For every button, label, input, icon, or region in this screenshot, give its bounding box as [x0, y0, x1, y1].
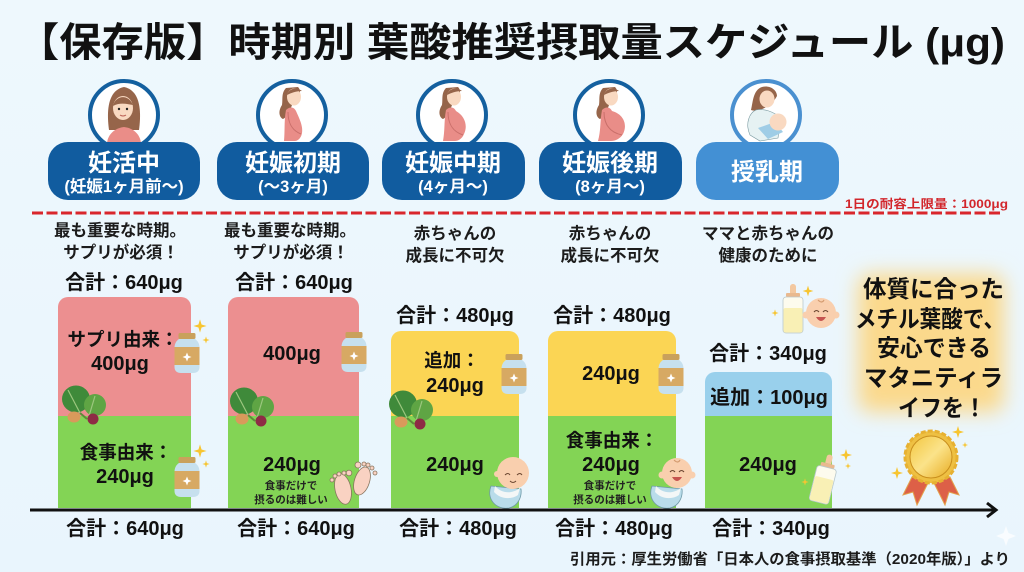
panel: stage label 妊娠後期	[539, 142, 682, 200]
axis arrow	[30, 503, 996, 517]
panel: stage label 授乳期	[696, 142, 839, 200]
icon: supplement bottle 3	[342, 332, 366, 372]
bar chart: 授乳期: 追加：100μg	[710, 386, 828, 409]
stage description 4: 成長に不可欠	[560, 245, 660, 265]
icon: mother nursing	[732, 81, 800, 149]
tolerable upper limit line	[32, 212, 1000, 214]
panel: stage label 妊娠中期: (4ヶ月～)	[418, 178, 488, 196]
icon: gold medal	[891, 426, 968, 505]
top total 2: 合計：640μg	[235, 271, 353, 294]
panel: stage label 妊活中: 妊活中	[88, 150, 160, 177]
bar chart: 妊娠初期: 摂るのは難しい	[254, 493, 328, 506]
citation: 引用元：厚生労働省「日本人の食事摂取基準（2020年版）」より	[570, 550, 1010, 568]
stage description 2: サプリが必須！	[233, 242, 349, 262]
bar chart: 妊娠後期: 摂るのは難しい	[573, 493, 647, 506]
stage description 5: 健康のために	[718, 246, 818, 265]
callout: マタニティラ	[864, 365, 1003, 391]
icon: milk bottle on bar	[809, 452, 840, 505]
stage description 2	[224, 221, 356, 262]
panel: stage label 授乳期: 授乳期	[731, 159, 803, 186]
icon: pregnant early	[258, 81, 326, 149]
panel: stage label 妊娠初期	[217, 142, 369, 200]
bottom total 2: 合計：640μg	[237, 517, 355, 540]
panel: stage label 妊娠初期: (～3ヶ月)	[258, 178, 328, 196]
icon: supplement bottle 4	[502, 354, 526, 394]
icon: supplement bottle 5	[658, 354, 684, 394]
bottom total 3: 合計：480μg	[399, 517, 517, 540]
bar chart: 妊娠中期: 240μg	[426, 375, 484, 397]
callout glow	[858, 274, 1004, 412]
bar chart: 妊活中: 400μg	[91, 353, 149, 375]
bar chart: 妊娠後期: 食事由来：	[566, 430, 658, 451]
stage description 1: 最も重要な時期。	[54, 221, 186, 240]
icon: greens 3	[389, 390, 433, 430]
stage description 5: ママと赤ちゃんの	[702, 224, 834, 243]
stage description 3: 赤ちゃんの	[414, 224, 496, 243]
icon: pregnant late	[575, 81, 643, 149]
icon: greens 2	[230, 388, 274, 426]
stage description 3: 成長に不可欠	[406, 245, 504, 265]
icon: supplement bottle 2	[174, 444, 210, 497]
icon: pregnant middle	[418, 81, 486, 149]
upper limit label: 1日の耐容上限量：1000μg	[845, 196, 1008, 211]
bar chart: 妊娠後期: 240μg	[582, 363, 640, 385]
bar chart: 授乳期: 240μg	[739, 454, 797, 476]
bottom total 4: 合計：480μg	[555, 517, 673, 540]
stage description 3	[406, 224, 504, 265]
top total 5: 合計：340μg	[709, 342, 827, 365]
bar chart: 妊娠後期: 食事だけで	[584, 479, 636, 492]
stage description 1	[54, 221, 186, 262]
stage description 2: 最も重要な時期。	[224, 221, 356, 240]
callout: 体質に合った	[863, 276, 1004, 302]
icon: woman preconception	[90, 81, 158, 149]
panel: stage label 妊娠中期	[382, 142, 525, 200]
bottom total 1: 合計：640μg	[66, 517, 184, 540]
icon: greens 1	[62, 386, 106, 424]
bar chart: 妊娠初期: 食事だけで	[265, 479, 317, 492]
callout: メチル葉酸で、	[855, 306, 1005, 332]
bar chart: 妊娠初期: 240μg	[263, 454, 321, 476]
icon: milk bottle and baby face	[771, 284, 840, 333]
bar chart: 妊娠初期	[228, 297, 359, 508]
panel: stage label 妊娠中期: 妊娠中期	[405, 150, 501, 177]
bar chart: 授乳期	[705, 372, 832, 508]
callout: 安心できる	[877, 335, 991, 361]
top total 4: 合計：480μg	[553, 304, 671, 327]
callout	[855, 276, 1005, 421]
top total 1: 合計：640μg	[65, 271, 183, 294]
bar chart: 妊娠中期: 240μg	[426, 454, 484, 476]
bar chart: 妊娠後期: 240μg	[582, 454, 640, 476]
top total 3: 合計：480μg	[396, 304, 514, 327]
icon: baby footprints	[330, 462, 377, 506]
sparkles: milk bottle	[801, 449, 852, 486]
icon: baby smiling with bib	[651, 458, 696, 508]
panel: stage label 妊娠初期: 妊娠初期	[245, 150, 341, 177]
stage description 1: サプリが必須！	[63, 242, 179, 262]
title: 【保存版】時期別 葉酸推奨摂取量スケジュール (μg)	[17, 21, 1005, 65]
bar chart: 妊活中	[58, 297, 191, 508]
bar chart: 妊活中: 食事由来：	[80, 442, 172, 463]
icon: supplement bottle 1	[174, 319, 210, 373]
watermark sparkle	[996, 526, 1016, 546]
panel: stage label 妊活中	[48, 142, 200, 200]
stage description 4	[560, 224, 660, 265]
bar chart: 妊娠後期	[548, 331, 676, 508]
stage description 5	[702, 224, 834, 265]
bar chart: 妊活中: サプリ由来：	[67, 329, 179, 350]
bottom total 5: 合計：340μg	[712, 517, 830, 540]
callout: イフを！	[898, 395, 986, 421]
stage description 4: 赤ちゃんの	[569, 224, 651, 243]
icon: baby sleeping	[490, 457, 529, 508]
bar chart: 妊娠初期: 400μg	[263, 343, 321, 365]
bar chart: 妊活中: 240μg	[96, 466, 154, 488]
panel: stage label 妊娠後期: 妊娠後期	[562, 150, 658, 177]
bar chart: 妊娠中期	[391, 331, 519, 508]
panel: stage label 妊活中: (妊娠1ヶ月前～)	[64, 177, 184, 196]
bar chart: 妊娠中期: 追加：	[424, 350, 480, 371]
panel: stage label 妊娠後期: (8ヶ月～)	[575, 178, 645, 196]
